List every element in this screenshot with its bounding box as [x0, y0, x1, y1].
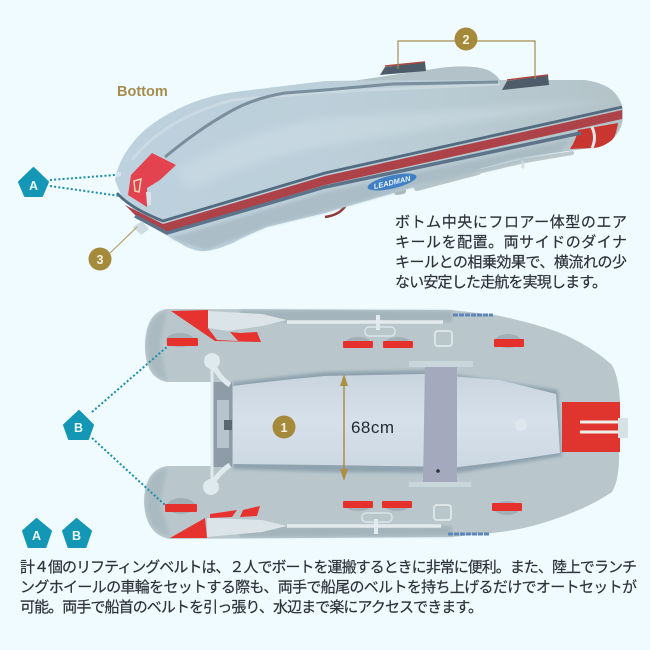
carrying handle: right: [502, 75, 549, 90]
text block: lifting belts description: 可能。両手で船首のベルトを引っ張り、水辺まで楽にアクセスできます。: [20, 599, 483, 616]
callout: feature 3 leader and badge: [88, 227, 137, 270]
bow fittings: [115, 172, 151, 205]
transom ropes: [210, 362, 214, 487]
left tube end shading: [146, 311, 170, 536]
callout: feature 2 bracket and badge: 2: [463, 33, 470, 47]
callout: feature 3 leader and badge: 3: [97, 253, 104, 267]
bottom oar: [170, 505, 451, 538]
legend: markers A and B: [23, 519, 91, 547]
callout: marker B with dotted leaders: B: [74, 421, 83, 435]
callout: marker A with dotted leaders: A: [29, 179, 38, 193]
red stern patch: [562, 402, 620, 452]
text block: lifting belts description: 計４個のリフティングベルトは、２人でボートを運搬するときに非常に便利。また、陸上でランチ: [20, 559, 637, 576]
text block: air keel description: キールを配置。両サイドのダイナ: [395, 234, 627, 251]
text block: air keel description: ない安定した走航を実現します。: [395, 274, 607, 291]
lifting belts: [165, 338, 524, 512]
transom bracket: [217, 400, 229, 448]
text block: lifting belts description: ングホイールの車輪をセットする際も、両手で船尾のベルトを持ち上げるだけでオートセットが: [20, 579, 637, 596]
callout: marker B with dotted leaders: [64, 346, 168, 505]
top oar: [171, 310, 452, 346]
carrying handle: left: [380, 62, 426, 75]
text block: air keel description: キールとの相乗効果で、横流れの少: [395, 254, 627, 271]
rub strake: upper dark line: [117, 107, 622, 221]
callout: width dimension 68cm: [340, 374, 394, 481]
upper panel seam: [132, 84, 500, 160]
heading: Bottom: Bottom: [117, 84, 168, 100]
lower tube shading: [240, 526, 452, 537]
illustration: boat seen from below: [115, 62, 623, 251]
hull highlight: [175, 100, 610, 190]
rub strake: red band: [125, 110, 622, 232]
wheel bars: [397, 153, 572, 192]
seat: [423, 364, 457, 484]
callout: marker A with dotted leaders: [19, 168, 120, 196]
far tube tail: [325, 66, 502, 120]
hull outline: [144, 309, 620, 539]
text block: lifting belts description: [20, 559, 637, 616]
red strap: [325, 205, 346, 217]
bow wheel: [133, 221, 149, 235]
hull logos: [448, 315, 493, 534]
transom plate: [212, 382, 232, 467]
legend: markers A and B: A: [32, 529, 41, 543]
bow belt ring: [134, 179, 141, 192]
rub strake: lower dark line: [135, 133, 581, 233]
centre keel stripe: [165, 82, 498, 157]
illustration: boat seen from above: [144, 309, 628, 539]
callout: feature 1 badge: 1: [281, 421, 288, 435]
callout: feature 2 bracket and badge: [398, 28, 535, 79]
belt shadows: [166, 333, 521, 515]
logo badge: [366, 170, 418, 194]
text block: air keel description: [395, 214, 627, 291]
red bow patch: [128, 153, 176, 207]
hull body: [115, 80, 623, 251]
upper tube shading: [240, 310, 452, 322]
floor: [233, 374, 560, 467]
floor edge shadow: [233, 370, 562, 473]
callout: feature 1 badge: [272, 416, 296, 438]
callout: width dimension 68cm: 68cm: [351, 418, 394, 437]
text block: air keel description: ボトム中央にフロアー体型のエア: [395, 214, 627, 231]
logo badge: LEADMAN: [373, 174, 412, 191]
legend: markers A and B: B: [72, 529, 81, 543]
lower hull shade: [170, 140, 570, 250]
red stern patch: [570, 123, 618, 149]
